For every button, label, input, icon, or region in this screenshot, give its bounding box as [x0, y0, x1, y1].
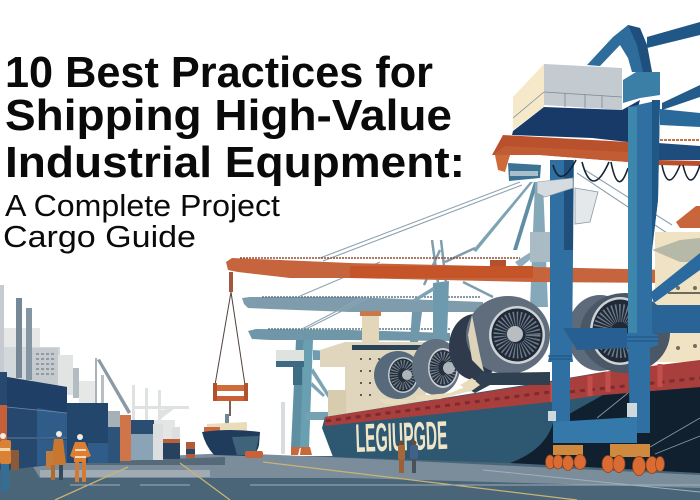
- title line 1: 10 Best Practices for: [5, 48, 433, 97]
- stacked shipping containers: [0, 372, 195, 470]
- turbine large: [449, 296, 550, 393]
- main ship hull with name: [322, 360, 700, 473]
- lifting slings: [215, 272, 245, 385]
- hanging cables: [553, 160, 700, 182]
- title line 2: Shipping High-Value: [5, 91, 452, 140]
- cream ship superstructure: [320, 311, 426, 420]
- turbine middle: [412, 339, 470, 401]
- turbine behind crane: [567, 293, 670, 373]
- worker 1: [0, 433, 19, 492]
- rear column: [548, 160, 574, 422]
- turbine far: [374, 351, 422, 404]
- subtitle line 1: A Complete Project: [5, 188, 280, 223]
- workers near ship: [398, 440, 418, 473]
- front column: [623, 100, 660, 433]
- foreground blue gantry crane: [492, 22, 700, 443]
- title: [5, 48, 465, 187]
- subtitle line 2: Cargo Guide: [3, 219, 196, 254]
- upper orange boom: [492, 135, 628, 162]
- crane wheel bogies: [546, 444, 664, 476]
- worker 2: [46, 431, 66, 480]
- cross beams: [563, 328, 627, 350]
- red deck railing: [325, 360, 700, 426]
- top cargo box: [513, 64, 622, 130]
- orange vehicle on quay: [245, 451, 263, 458]
- cream structure at right edge: [652, 206, 700, 362]
- dark boom underside: [512, 100, 640, 142]
- upper gantry arc and braces: [587, 25, 652, 72]
- orange main crane boom with spreader: [213, 258, 670, 416]
- worker 3: [70, 434, 91, 482]
- mooring lines: [597, 393, 700, 454]
- subtitle: [3, 188, 280, 254]
- base beam: [553, 417, 637, 443]
- background grey-blue harbour cranes: [242, 170, 672, 455]
- distant cargo ship: [202, 414, 260, 456]
- ground: port quay: [0, 453, 700, 500]
- distant city skyline: [0, 285, 285, 460]
- spreader beam: [213, 383, 248, 416]
- workers in orange safety gear: [0, 431, 91, 492]
- turbines on deck: [374, 293, 670, 404]
- main ship hull with name: LEGIUPGDE: [355, 414, 448, 461]
- hanging cabin and platforms: [508, 163, 598, 224]
- title line 3: Industrial Equpment:: [5, 138, 465, 187]
